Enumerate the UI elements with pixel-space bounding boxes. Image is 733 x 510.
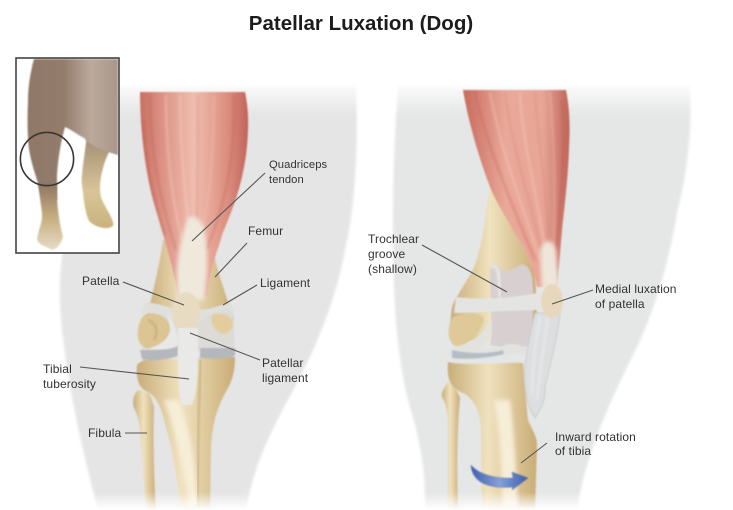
fibula bbox=[133, 390, 156, 510]
inset: dog leg bbox=[16, 58, 119, 253]
patellar ligament bbox=[178, 328, 198, 405]
tibia highlight bbox=[494, 400, 518, 508]
left meniscus bbox=[140, 343, 178, 360]
panel: left leg silhouette bbox=[60, 86, 357, 510]
muscle fibres bbox=[475, 92, 563, 260]
label: quadriceps tendon: Quadriceps bbox=[269, 159, 327, 171]
capsule inner left bbox=[148, 314, 178, 350]
capsule back bbox=[142, 310, 235, 350]
tibia bbox=[137, 356, 235, 510]
labels: left knee bbox=[43, 159, 328, 440]
label: trochlear groove: groove bbox=[368, 247, 406, 261]
tibia bbox=[448, 362, 537, 510]
label: inward rotation: of tibia bbox=[555, 444, 591, 458]
leader: trochlear groove bbox=[422, 245, 507, 292]
femur bbox=[146, 240, 234, 320]
near paw bbox=[37, 183, 63, 250]
fibula bbox=[442, 382, 460, 510]
icon: rotation arrow bbox=[471, 465, 528, 490]
leader: tibial tuberosity bbox=[80, 367, 189, 379]
title: Patellar Luxation (Dog) bbox=[249, 12, 473, 35]
label: tibial tuberosity: tuberosity bbox=[43, 377, 96, 391]
label: trochlear groove: (shallow) bbox=[368, 262, 417, 276]
left condyle bbox=[138, 313, 170, 348]
quadriceps tendon bbox=[540, 241, 560, 295]
muscle bbox=[463, 90, 570, 287]
label: inward rotation: Inward rotation bbox=[555, 430, 636, 444]
label: patellar ligament: Patellar bbox=[262, 356, 304, 370]
right condyle bbox=[211, 314, 233, 334]
capsule arc bbox=[452, 318, 527, 355]
quadriceps tendon bbox=[177, 216, 207, 300]
leader: patella bbox=[123, 282, 184, 305]
far leg bbox=[82, 135, 113, 228]
patellar ligament bbox=[524, 313, 560, 418]
label: tibial tuberosity: Tibial bbox=[43, 362, 72, 376]
patella bbox=[541, 284, 563, 318]
dog body bbox=[28, 59, 118, 200]
label: patellar ligament: ligament bbox=[262, 371, 309, 385]
ligament band bbox=[454, 292, 542, 313]
label: ligament: Ligament bbox=[260, 276, 311, 290]
trochlear ridge bbox=[491, 266, 500, 298]
label: medial luxation: Medial luxation bbox=[595, 282, 677, 296]
label: femur: Femur bbox=[248, 224, 283, 238]
condyle bbox=[449, 314, 484, 347]
femur bbox=[451, 187, 538, 340]
label: fibula: Fibula bbox=[88, 426, 122, 440]
panel: right leg silhouette bbox=[393, 86, 690, 510]
label: medial luxation: of patella bbox=[595, 297, 645, 311]
right meniscus bbox=[200, 348, 235, 359]
meniscus bbox=[452, 350, 504, 359]
tibia shadow line bbox=[198, 360, 201, 508]
muscle bbox=[140, 92, 248, 296]
inset circle bbox=[20, 132, 74, 186]
ligament streaks bbox=[532, 316, 548, 400]
leader: ligament bbox=[223, 285, 257, 305]
tibia highlight bbox=[164, 400, 198, 508]
illustration: luxated knee bbox=[442, 90, 570, 510]
leader: medial luxation bbox=[552, 290, 593, 304]
patella bbox=[172, 292, 200, 332]
leader: inward rotation bbox=[521, 443, 547, 463]
leader: fibula bbox=[125, 432, 147, 434]
label: trochlear groove: Trochlear bbox=[368, 232, 419, 246]
leader: femur bbox=[215, 243, 247, 277]
leader: quadriceps tendon bbox=[192, 173, 265, 241]
muscle fibres bbox=[143, 95, 234, 250]
label: patella: Patella bbox=[82, 274, 120, 288]
inset frame bbox=[16, 58, 119, 253]
leader: patellar ligament bbox=[190, 333, 260, 360]
labels: right knee bbox=[368, 232, 677, 463]
illustration: normal knee bbox=[133, 92, 248, 510]
ligament band bbox=[141, 302, 234, 324]
trochlear groove bbox=[490, 264, 533, 348]
label: quadriceps tendon: tendon bbox=[269, 174, 304, 186]
